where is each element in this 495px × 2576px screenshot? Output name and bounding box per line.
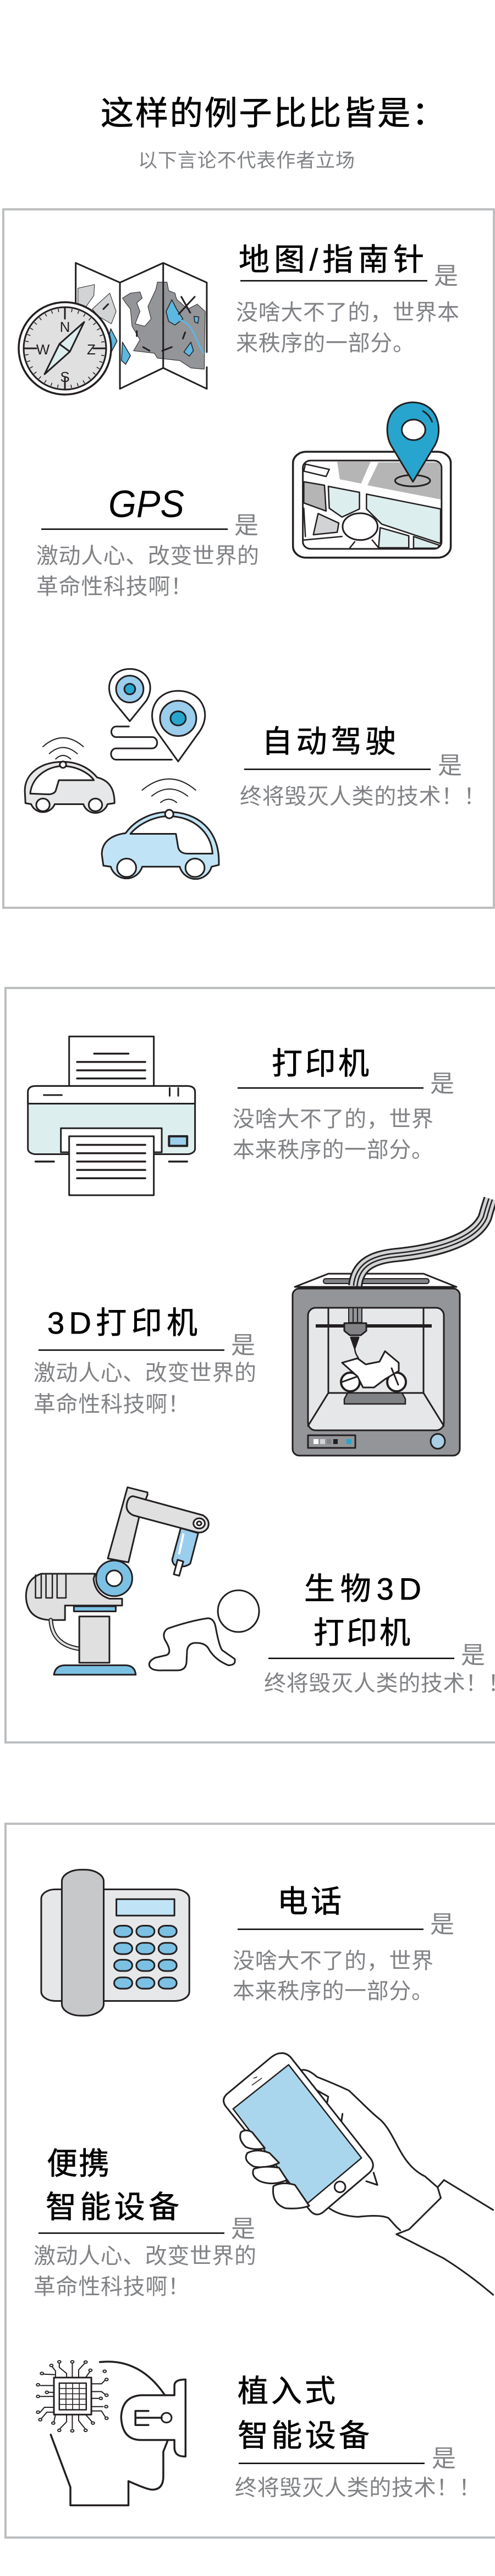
text block: 打印机: 本来秩序的一部分。 (233, 1138, 433, 1162)
icon: self-driving cars and map pins (25, 669, 219, 879)
text block: 电话: 是 (430, 1911, 454, 1938)
text block: 打印机 (233, 1046, 454, 1162)
text block: 便携智能设备: 智能设备 (46, 2190, 179, 2224)
text block: 地图/指南针: 是 (434, 263, 458, 290)
text block: 电话: 本来秩序的一部分。 (233, 1979, 433, 2003)
text block: 植入式智能设备 (235, 2374, 481, 2500)
text block: 自动驾驶: 是 (438, 752, 462, 779)
icon: head with implanted chip (36, 2361, 185, 2505)
text block: GPS (36, 482, 259, 599)
text block: 便携智能设备: 激动人心、改变世界的 (34, 2244, 256, 2268)
text block: 植入式智能设备: 是 (432, 2445, 456, 2472)
text block: 便携智能设备 (34, 2146, 256, 2299)
panel: maps, GPS, autonomous driving (3, 209, 494, 908)
text block: 电话 (233, 1884, 454, 2003)
text block: 打印机: 打印机 (272, 1046, 369, 1081)
title: 这样的例子比比皆是： (101, 95, 445, 132)
icon: robot arm and crawling baby (26, 1487, 259, 1675)
text block: 植入式智能设备: 植入式 (238, 2374, 336, 2408)
text block: 植入式智能设备: 终将毁灭人类的技术！！ (235, 2476, 481, 2500)
text block: GPS: GPS (108, 482, 184, 525)
icon: compass (19, 302, 111, 395)
text block: 便携智能设备: 便携 (47, 2146, 109, 2181)
text block: 地图/指南针: 地图/指南针 (239, 242, 424, 277)
icon: hand holding smartphone (224, 2053, 493, 2295)
text block: GPS: 是 (234, 512, 258, 539)
text block: GPS: 激动人心、改变世界的 (36, 544, 259, 568)
text block: 地图/指南针: 没啥大不了的，世界本 (236, 301, 459, 325)
panel: phones (6, 1824, 495, 2538)
icon: compass: N (60, 319, 70, 335)
text block: 3D打印机: 革命性科技啊！ (34, 1392, 190, 1417)
icon: printer (28, 1036, 195, 1195)
icon: compass: W (36, 341, 50, 358)
text block: 自动驾驶: 自动驾驶 (262, 724, 396, 759)
text block: 打印机: 是 (430, 1070, 454, 1097)
text block: 便携智能设备: 是 (231, 2216, 255, 2242)
text block: 地图/指南针: 来秩序的一部分。 (236, 331, 415, 356)
text block: 电话: 没啥大不了的，世界 (233, 1949, 433, 1973)
icon: GPS navigator with pin (293, 402, 451, 558)
icon: compass: Z (87, 341, 96, 358)
text block: 便携智能设备: 革命性科技啊！ (34, 2275, 190, 2299)
text block: 3D打印机: 3D打印机 (47, 1306, 197, 1340)
icon: folding map (76, 263, 207, 389)
text block: 打印机: 没啥大不了的，世界 (233, 1107, 433, 1131)
icon: 3D printer (293, 1199, 491, 1456)
text block: GPS: 革命性科技啊！ (36, 575, 193, 599)
text block: 生物3D打印机 (264, 1572, 495, 1696)
text block: 生物3D打印机: 是 (461, 1642, 485, 1669)
icon: compass: S (60, 369, 70, 385)
text block: 自动驾驶 (240, 724, 486, 809)
text block: 3D打印机: 是 (231, 1332, 255, 1359)
text block: 3D打印机 (34, 1306, 256, 1417)
text block: 生物3D打印机: 生物3D (304, 1572, 421, 1606)
text block: 生物3D打印机: 打印机 (314, 1615, 410, 1650)
text block: 自动驾驶: 终将毁灭人类的技术！！ (240, 785, 486, 809)
text block: 植入式智能设备: 智能设备 (238, 2418, 370, 2453)
subtitle: 以下言论不代表作者立场 (138, 150, 355, 171)
text block: 地图/指南针 (236, 242, 459, 356)
icon: desk telephone (41, 1870, 189, 2016)
text block: 电话: 电话 (277, 1884, 342, 1919)
text block: 3D打印机: 激动人心、改变世界的 (34, 1361, 256, 1385)
panel: printers (6, 988, 495, 1742)
